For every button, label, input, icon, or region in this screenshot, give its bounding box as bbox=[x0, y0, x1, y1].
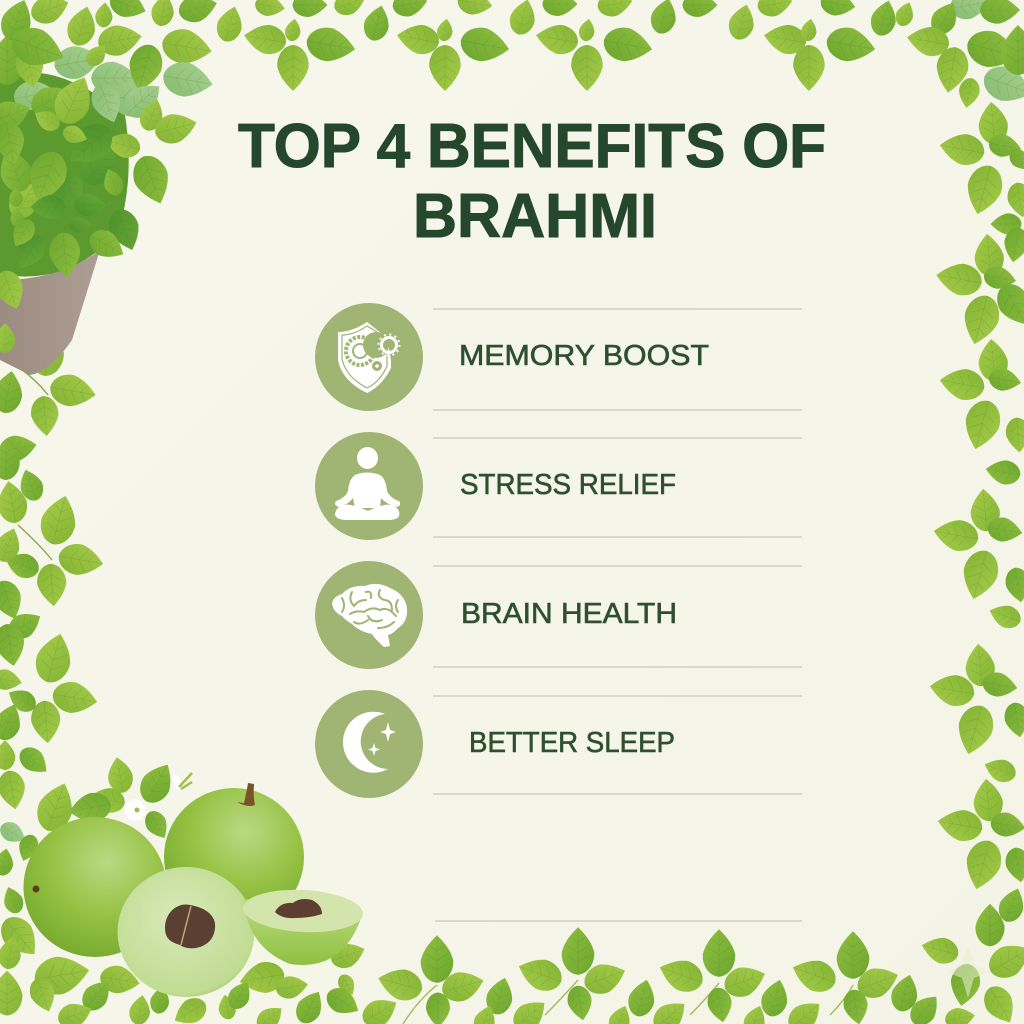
flowers bbox=[123, 773, 192, 822]
terracotta pot bbox=[0, 250, 100, 375]
benefit label: brain health: BRAIN HEALTH bbox=[461, 598, 677, 630]
half fruit: cut face bbox=[118, 867, 254, 997]
half fruit: right wedge bbox=[243, 899, 363, 965]
title bbox=[238, 112, 826, 251]
benefit label: stress relief: STRESS RELIEF bbox=[460, 469, 676, 501]
benefit label: memory boost: MEMORY BOOST bbox=[459, 340, 709, 372]
fruit cluster: amla with leaves bbox=[0, 755, 369, 1024]
icon: shield with gears bbox=[338, 322, 400, 393]
icon: meditating person bbox=[335, 447, 400, 520]
bottom leaf border bbox=[357, 884, 1024, 1024]
empty divider line bbox=[435, 920, 802, 922]
left leaf border bbox=[0, 325, 106, 812]
icon: brain bbox=[332, 584, 407, 647]
potted plant: top-left brahmi bbox=[0, 0, 220, 375]
benefit row: better sleep bbox=[315, 690, 802, 798]
benefit row: memory boost bbox=[315, 303, 802, 411]
benefit label: better sleep: BETTER SLEEP bbox=[469, 727, 675, 759]
right leaf border bbox=[893, 0, 1024, 894]
top leaf border bbox=[213, 0, 901, 91]
title: TOP 4 BENEFITS OF bbox=[238, 112, 826, 181]
whole fruit: left bbox=[24, 817, 166, 957]
benefit row: stress relief bbox=[315, 432, 802, 540]
icon: moon and stars bbox=[343, 712, 396, 773]
benefit row: brain health bbox=[315, 561, 802, 669]
title: BRAHMI bbox=[413, 182, 657, 251]
whole fruit: back bbox=[164, 788, 304, 926]
